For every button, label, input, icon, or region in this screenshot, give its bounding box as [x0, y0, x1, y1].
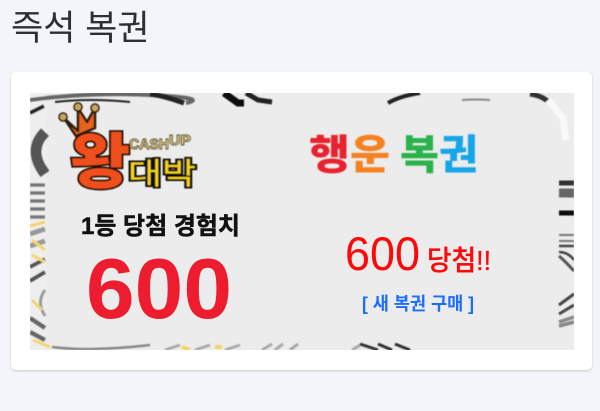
panel: lottery card	[11, 72, 592, 370]
swirl border pattern	[30, 93, 574, 350]
heading: lucky lottery	[310, 133, 476, 174]
logo: crown and wordmark	[59, 103, 196, 196]
heading: lucky lottery: 운	[350, 132, 390, 178]
logo: crown and wordmark: UP	[169, 132, 191, 149]
heading: lucky lottery: 복	[400, 132, 439, 178]
logo mark: 왕	[70, 129, 130, 196]
win amount: 600	[345, 227, 420, 280]
CASH UP text: CASH	[129, 136, 169, 153]
buy new ticket link: [ 새 복권 구매 ]	[362, 294, 474, 314]
ticket background	[30, 93, 574, 350]
heading: lucky lottery: 권	[439, 132, 478, 178]
win label: 당첨!!	[427, 245, 491, 276]
heading: lucky lottery: 행	[309, 132, 350, 178]
title: 즉석 복권	[11, 9, 150, 48]
lottery ticket image	[30, 93, 574, 350]
logo subtitle: 대박	[128, 158, 196, 191]
icon: crown	[59, 103, 99, 136]
first prize label: 1등 당첨 경험치	[81, 213, 240, 240]
first prize value: 600	[86, 242, 232, 337]
